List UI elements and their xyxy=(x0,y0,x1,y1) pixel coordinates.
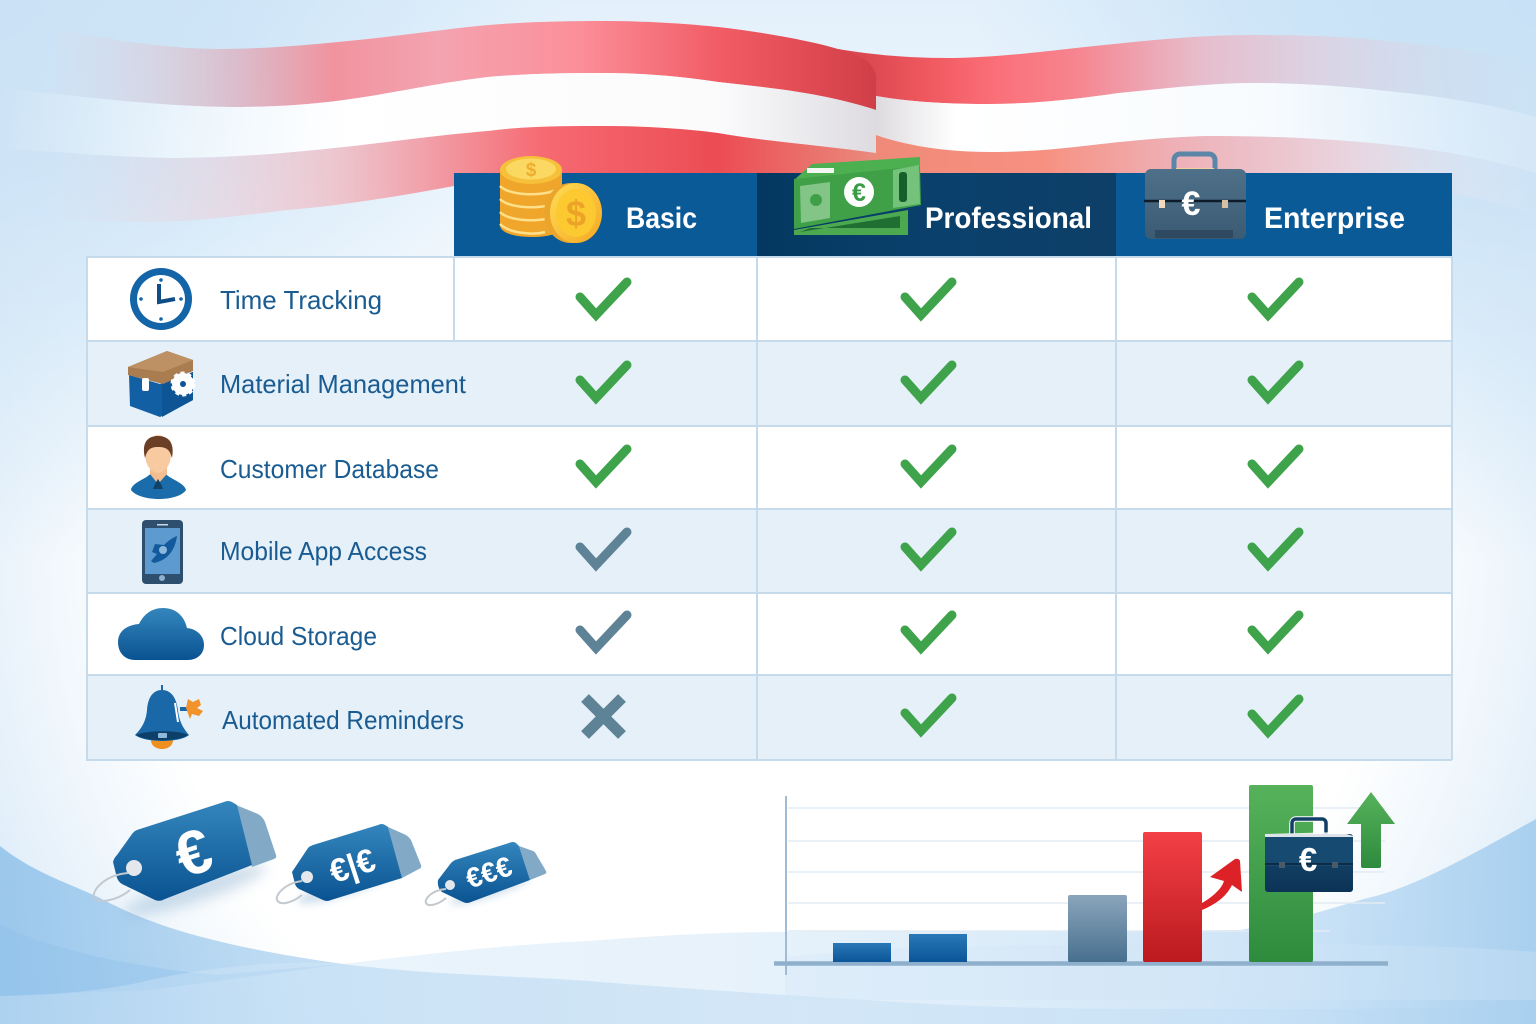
bar: blue 1 xyxy=(833,943,891,962)
checks: Basic column xyxy=(580,282,627,735)
header: Professional: Professional xyxy=(925,202,1092,235)
bar: slate xyxy=(1068,895,1127,962)
icon: euro banknotes: € xyxy=(852,179,866,207)
row: Automated Reminders: Automated Reminders xyxy=(222,705,464,735)
header: Enterprise: Enterprise xyxy=(1264,202,1405,235)
arrow: green up xyxy=(1347,792,1395,868)
price tag: large xyxy=(94,801,276,925)
header: Professional xyxy=(757,173,1117,256)
checks: Professional column xyxy=(905,282,952,731)
icon: person xyxy=(131,435,186,499)
price tag: small: €€€ xyxy=(462,850,516,894)
ribbon: flag right section xyxy=(838,35,1536,215)
price tag: large: € xyxy=(166,815,221,892)
table header xyxy=(454,173,1452,256)
bar: green xyxy=(1249,785,1313,962)
row: Automated Reminders xyxy=(135,685,464,749)
row: Mobile App Access xyxy=(142,520,427,584)
icon: enterprise briefcase: € xyxy=(1182,185,1201,223)
row: Time Tracking xyxy=(130,268,382,330)
cross: Automated Reminders not in Basic xyxy=(585,698,622,735)
row: Customer Database xyxy=(131,435,439,499)
icon: chart briefcase: € xyxy=(1299,841,1317,878)
bar chart xyxy=(774,785,1395,975)
icon: gold coins xyxy=(500,156,602,243)
ribbon: flag left section xyxy=(0,20,876,222)
row backgrounds xyxy=(86,256,1452,760)
icon: euro banknotes xyxy=(794,157,921,235)
price tag: medium xyxy=(277,824,421,911)
row: Customer Database: Customer Database xyxy=(220,454,439,484)
row: Cloud Storage: Cloud Storage xyxy=(220,621,377,651)
icon: enterprise briefcase xyxy=(1144,154,1246,239)
icon: bell xyxy=(135,685,203,749)
row: Mobile App Access: Mobile App Access xyxy=(220,536,427,566)
icon: box with gear xyxy=(128,351,194,417)
row: Cloud Storage xyxy=(118,608,377,660)
price tag: medium: €|€ xyxy=(325,841,380,890)
header: Enterprise xyxy=(1116,173,1452,256)
icon: chart briefcase xyxy=(1265,819,1353,892)
row: Time Tracking: Time Tracking xyxy=(220,285,382,315)
row: Material Management: Material Management xyxy=(220,369,467,399)
table body xyxy=(86,256,1452,760)
chart axes xyxy=(785,796,787,975)
header: Basic: Basic xyxy=(626,202,697,235)
checks: Enterprise column xyxy=(1252,282,1299,732)
header: Basic xyxy=(454,173,758,256)
row: Material Management xyxy=(128,351,467,417)
price tag: small xyxy=(426,842,546,910)
bar: blue 2 xyxy=(909,934,967,962)
icon: tablet xyxy=(142,520,183,584)
icon: gold coins: $ xyxy=(526,160,537,181)
arrow: red growth xyxy=(1202,859,1242,910)
icon: clock xyxy=(130,268,192,330)
icon: gold coins: $ xyxy=(566,193,586,234)
bar: red xyxy=(1143,832,1202,962)
icon: cloud xyxy=(118,608,204,660)
